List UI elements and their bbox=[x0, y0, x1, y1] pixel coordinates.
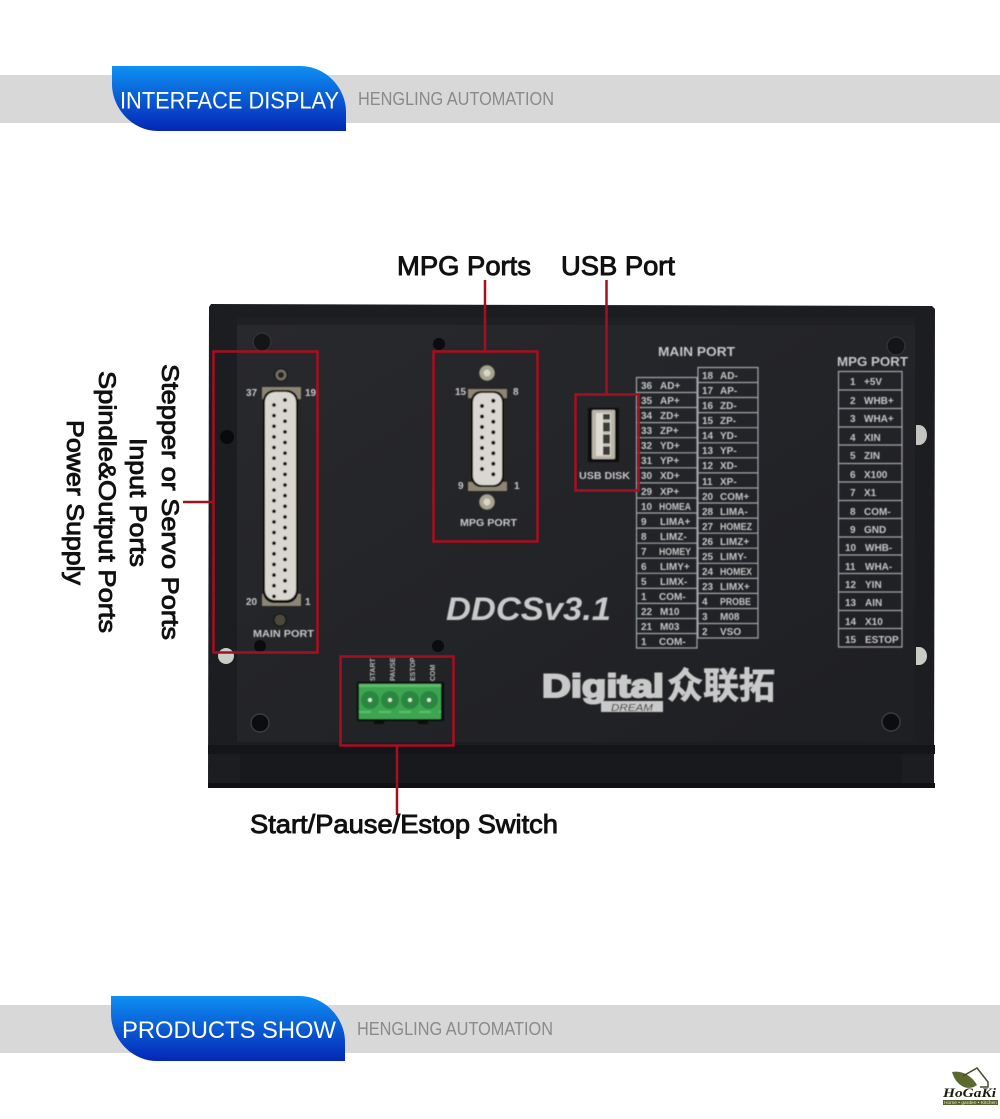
main port pin table: 4 bbox=[702, 597, 708, 608]
main port pin table: 30 bbox=[641, 471, 653, 482]
MPG port pin table: ESTOP bbox=[865, 635, 899, 646]
callout: rear ports list bbox=[61, 364, 183, 640]
controller back panel bbox=[208, 304, 935, 788]
brand logo: 众联拓 bbox=[667, 665, 775, 706]
MPG port connector: 15 bbox=[455, 387, 467, 398]
MPG port pin table: 13 bbox=[845, 598, 857, 609]
callout: rear ports list: Power Supply bbox=[61, 420, 88, 586]
MPG port pin table: 8 bbox=[850, 507, 856, 518]
green terminal block: PAUSE bbox=[390, 657, 397, 681]
section header: products show: PRODUCTS SHOW bbox=[122, 1017, 336, 1044]
callout: MPG ports: MPG Ports bbox=[397, 251, 531, 281]
MPG port pin table: 15 bbox=[845, 635, 857, 646]
callout frames and leader lines bbox=[183, 280, 638, 815]
MPG port pin table: WHA+ bbox=[864, 414, 894, 425]
main port pin table: 6 bbox=[641, 562, 647, 573]
main port pin table: ZP- bbox=[720, 416, 736, 427]
main port pin table: AD+ bbox=[660, 381, 680, 392]
MPG port pin table: 5 bbox=[850, 451, 856, 462]
main port pin table: COM+ bbox=[720, 492, 749, 503]
section header: interface display: HENGLING AUTOMATION bbox=[358, 89, 554, 109]
main port pin table: 5 bbox=[641, 577, 647, 588]
main port pin table: 36 bbox=[641, 381, 653, 392]
main port pin table: 28 bbox=[702, 507, 714, 518]
green terminal block: COM bbox=[430, 664, 437, 681]
main port pin table: 17 bbox=[702, 386, 714, 397]
main port pin table: 31 bbox=[641, 456, 653, 467]
MPG port pin table: YIN bbox=[865, 580, 882, 591]
main port pin table: 35 bbox=[641, 396, 653, 407]
main port connector: 1 bbox=[305, 597, 311, 608]
main port pin table: 26 bbox=[702, 537, 714, 548]
main port connector: 19 bbox=[305, 388, 317, 399]
main port pin table: VSO bbox=[720, 627, 741, 638]
MPG port connector: MPG PORT bbox=[460, 518, 517, 529]
callout: switch: Start/Pause/Estop Switch bbox=[250, 809, 558, 839]
main port pin table: XD+ bbox=[660, 471, 680, 482]
main port pin table: 8 bbox=[641, 532, 647, 543]
main port pin table: PROBE bbox=[720, 597, 751, 608]
main port pin table: ZP+ bbox=[660, 426, 679, 437]
main port connector: 20 bbox=[246, 597, 258, 608]
main port pin table: ZD- bbox=[720, 401, 737, 412]
main port pin table: MAIN PORT bbox=[658, 345, 735, 359]
MPG port pin table: ZIN bbox=[864, 451, 880, 462]
main port pin table: AP+ bbox=[660, 396, 680, 407]
main port pin table: YP- bbox=[720, 446, 737, 457]
main port pin table: LIMX- bbox=[660, 577, 687, 588]
callout: rear ports list: Spindle&Output Ports bbox=[93, 371, 120, 633]
MPG port pin table bbox=[837, 355, 908, 647]
main port pin table: XP- bbox=[720, 477, 737, 488]
main port pin table: LIMY+ bbox=[660, 562, 690, 573]
main port pin table: 34 bbox=[641, 411, 653, 422]
HoGaKi logo bbox=[942, 1068, 998, 1105]
MPG port pin table: 14 bbox=[845, 617, 857, 628]
main port pin table: 10 bbox=[641, 502, 653, 513]
MPG port pin table: 3 bbox=[850, 414, 856, 425]
main port pin table: 2 bbox=[702, 627, 708, 638]
main port pin table: COM- bbox=[659, 592, 686, 603]
main port pin table: 25 bbox=[702, 552, 714, 563]
main port pin table: LIMZ+ bbox=[720, 537, 749, 548]
main port pin table: 16 bbox=[702, 401, 714, 412]
MPG port pin table: GND bbox=[864, 525, 886, 536]
USB port bbox=[579, 408, 631, 482]
MPG port pin table: XIN bbox=[864, 433, 881, 444]
main port pin table: 24 bbox=[702, 567, 714, 578]
main port pin table: 1 bbox=[641, 592, 647, 603]
MPG port pin table: WHB- bbox=[865, 543, 892, 554]
MPG port pin table: 6 bbox=[850, 470, 856, 481]
green terminal block bbox=[357, 657, 444, 724]
main port pin table: 3 bbox=[702, 612, 708, 623]
MPG port connector: 8 bbox=[513, 387, 519, 398]
main port pin table: 23 bbox=[702, 582, 714, 593]
main port pin table: 9 bbox=[641, 517, 647, 528]
main port pin table: 14 bbox=[702, 431, 714, 442]
main port pin table: LIMA+ bbox=[660, 517, 690, 528]
model name: DDCSv3.1 bbox=[446, 591, 611, 627]
MPG port pin table: 9 bbox=[850, 525, 856, 536]
main port pin table: 20 bbox=[702, 492, 714, 503]
main port pin table bbox=[636, 345, 758, 648]
MPG port pin table: 4 bbox=[850, 433, 856, 444]
MPG port connector: 1 bbox=[514, 481, 520, 492]
MPG port connector: 9 bbox=[458, 481, 464, 492]
MPG port pin table: X100 bbox=[864, 470, 888, 481]
USB port: USB DISK bbox=[579, 471, 631, 482]
main port pin table: YP+ bbox=[660, 456, 679, 467]
main port pin table: HOMEX bbox=[720, 567, 752, 578]
main port pin table: 21 bbox=[641, 622, 653, 633]
MPG port pin table: 12 bbox=[845, 580, 857, 591]
main port pin table: LIMZ- bbox=[660, 532, 687, 543]
main port pin table: M10 bbox=[660, 607, 680, 618]
main port pin table: 18 bbox=[702, 371, 714, 382]
main port pin table: AP- bbox=[720, 386, 737, 397]
section header: interface display bbox=[0, 66, 1000, 131]
main port pin table: 15 bbox=[702, 416, 714, 427]
main port pin table: 11 bbox=[702, 477, 713, 488]
brand logo: DREAM bbox=[611, 703, 654, 714]
callout: rear ports list: Input Ports bbox=[124, 438, 151, 567]
main port pin table: XD- bbox=[720, 461, 737, 472]
MPG port pin table: 10 bbox=[845, 543, 857, 554]
main port connector: 37 bbox=[246, 388, 258, 399]
main port pin table: COM- bbox=[659, 637, 686, 648]
MPG port pin table: MPG PORT bbox=[837, 355, 908, 369]
section header: products show: HENGLING AUTOMATION bbox=[357, 1019, 553, 1039]
callout: USB port: USB Port bbox=[561, 251, 676, 281]
MPG port pin table: X1 bbox=[864, 488, 877, 499]
main port pin table: YD+ bbox=[660, 441, 680, 452]
main port connector bbox=[246, 369, 317, 640]
HoGaKi logo: Home • garden • Kitchen bbox=[944, 1100, 998, 1105]
brand logo: Digital bbox=[542, 668, 664, 704]
MPG port pin table: X10 bbox=[865, 617, 883, 628]
main port pin table: 7 bbox=[641, 547, 647, 558]
main port pin table: 29 bbox=[641, 487, 653, 498]
MPG port pin table: 1 bbox=[850, 377, 856, 388]
main port pin table: 32 bbox=[641, 441, 653, 452]
main port pin table: 27 bbox=[702, 522, 714, 533]
main port pin table: 33 bbox=[641, 426, 653, 437]
main port pin table: LIMA- bbox=[720, 507, 748, 518]
MPG port pin table: WHA- bbox=[865, 562, 892, 573]
green terminal block: ESTOP bbox=[410, 657, 417, 681]
main port pin table: LIMY- bbox=[720, 552, 747, 563]
green terminal block: START bbox=[370, 657, 377, 681]
MPG port pin table: 11 bbox=[845, 562, 856, 573]
callout: rear ports list: Stepper or Servo Ports bbox=[156, 364, 183, 640]
section header: interface display: INTERFACE DISPLAY bbox=[120, 88, 339, 114]
main port pin table: 22 bbox=[641, 607, 653, 618]
MPG port pin table: WHB+ bbox=[864, 396, 894, 407]
HoGaKi logo: HoGaKi bbox=[942, 1085, 996, 1100]
MPG port pin table: COM- bbox=[864, 507, 891, 518]
main port pin table: XP+ bbox=[660, 487, 679, 498]
main port pin table: ZD+ bbox=[660, 411, 679, 422]
section header: products show bbox=[0, 996, 1000, 1061]
main port pin table: 1 bbox=[641, 637, 647, 648]
main port pin table: LIMX+ bbox=[720, 582, 750, 593]
MPG port pin table: AIN bbox=[865, 598, 882, 609]
brand logo bbox=[542, 665, 775, 714]
main port connector: MAIN PORT bbox=[253, 629, 314, 640]
main port pin table: HOMEA bbox=[659, 502, 691, 513]
main port pin table: HOMEY bbox=[659, 547, 691, 558]
main port pin table: M08 bbox=[720, 612, 740, 623]
main port pin table: YD- bbox=[720, 431, 737, 442]
MPG port connector bbox=[455, 365, 520, 529]
main port pin table: AD- bbox=[720, 371, 738, 382]
main port pin table: 12 bbox=[702, 461, 714, 472]
MPG port pin table: +5V bbox=[864, 377, 882, 388]
MPG port pin table: 2 bbox=[850, 396, 856, 407]
main port pin table: HOMEZ bbox=[720, 522, 752, 533]
main port pin table: 13 bbox=[702, 446, 714, 457]
MPG port pin table: 7 bbox=[850, 488, 856, 499]
main port pin table: M03 bbox=[660, 622, 680, 633]
